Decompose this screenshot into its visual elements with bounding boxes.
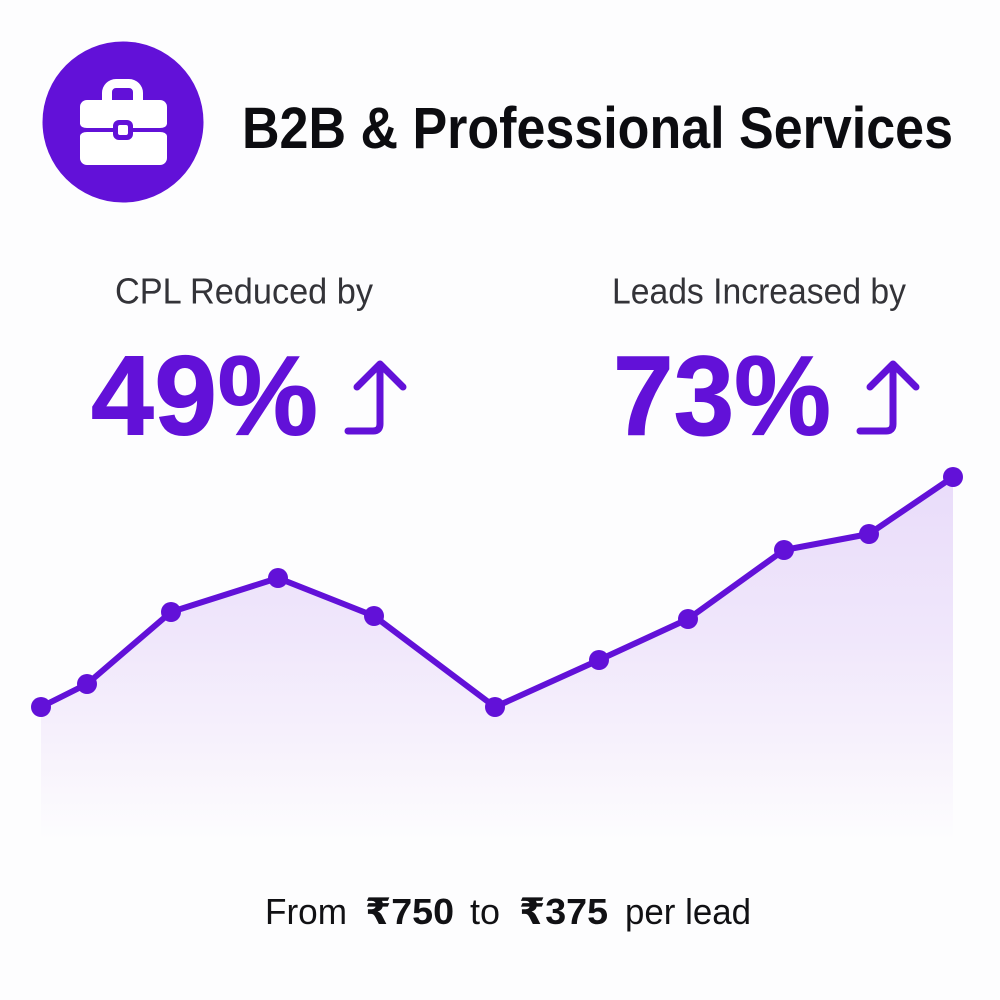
chart area fill <box>41 477 953 840</box>
chart line <box>41 477 953 707</box>
footer text: ₹750 <box>365 891 454 932</box>
arrow: up, leads <box>860 364 916 431</box>
label: CPL reduced: CPL Reduced by <box>115 270 373 312</box>
stat: 73%: 73% <box>613 332 831 458</box>
footer text: ₹375 <box>519 891 608 932</box>
chart data points <box>31 467 963 717</box>
label: leads increased: Leads Increased by <box>612 270 906 312</box>
footer text: From <box>265 891 347 932</box>
icon: briefcase badge <box>42 42 204 202</box>
footer text <box>265 891 751 932</box>
stat: 49%: 49% <box>91 332 318 458</box>
footer text: per lead <box>625 891 751 932</box>
line chart <box>31 467 963 840</box>
footer text: to <box>470 891 500 932</box>
arrow: up, CPL <box>348 364 403 431</box>
